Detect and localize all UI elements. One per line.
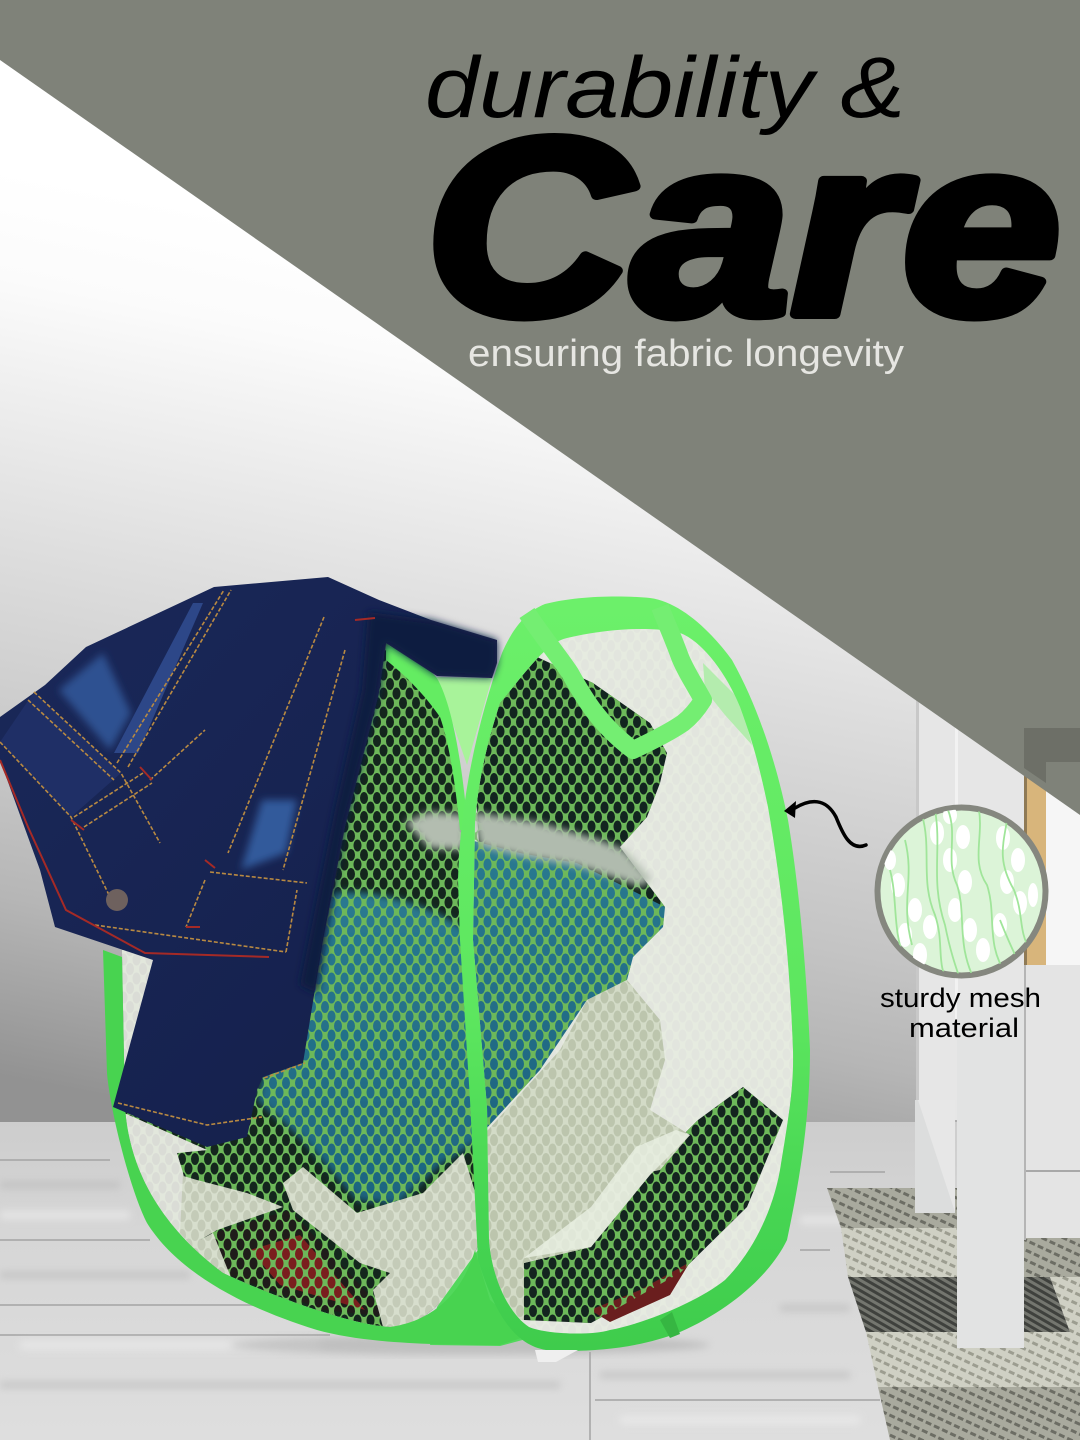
- handle strap: [527, 607, 703, 750]
- label: sturdy mesh material: [880, 983, 1041, 1043]
- floor: [0, 1122, 1080, 1440]
- pale green inner lining: [437, 677, 492, 765]
- label: sturdy mesh material: material: [909, 1013, 1019, 1043]
- orange stitching: [0, 590, 345, 1125]
- mesh detail holes and threads: [884, 805, 1038, 985]
- centre seam left arc: [386, 640, 468, 830]
- title: durability &: durability &: [425, 40, 905, 136]
- centre seam and right outer rim: [458, 596, 810, 1351]
- background wall: [0, 0, 1080, 1125]
- bottom fabric gusset: [430, 1250, 530, 1346]
- olive diagonal header panel: [0, 0, 1080, 815]
- dark denim folds: [300, 612, 497, 993]
- side cabinet: [915, 660, 1080, 1348]
- arrow to rim: [784, 801, 866, 846]
- jeans silhouette: [0, 577, 497, 1147]
- subtitle: ensuring fabric longevity: [468, 333, 904, 375]
- faded denim patches: [59, 653, 131, 750]
- rug: [827, 1188, 1080, 1440]
- cabinet shadow seen through panel: [1024, 728, 1080, 783]
- right mesh panel with clothes: [473, 629, 793, 1334]
- frame foot: [535, 1350, 578, 1362]
- laundry hamper: [100, 590, 810, 1362]
- red stitching: [0, 618, 375, 957]
- jeans button: [106, 889, 128, 911]
- left mesh panel with clothes: [122, 644, 478, 1327]
- denim jeans: [0, 577, 497, 1147]
- title: Care: Care: [425, 87, 1061, 368]
- mesh detail circle: [878, 805, 1046, 985]
- left rim: [103, 950, 530, 1345]
- floor shadow under hamper: [230, 1335, 710, 1355]
- rim tab: [660, 1312, 680, 1338]
- label: sturdy mesh material: sturdy mesh: [880, 983, 1041, 1013]
